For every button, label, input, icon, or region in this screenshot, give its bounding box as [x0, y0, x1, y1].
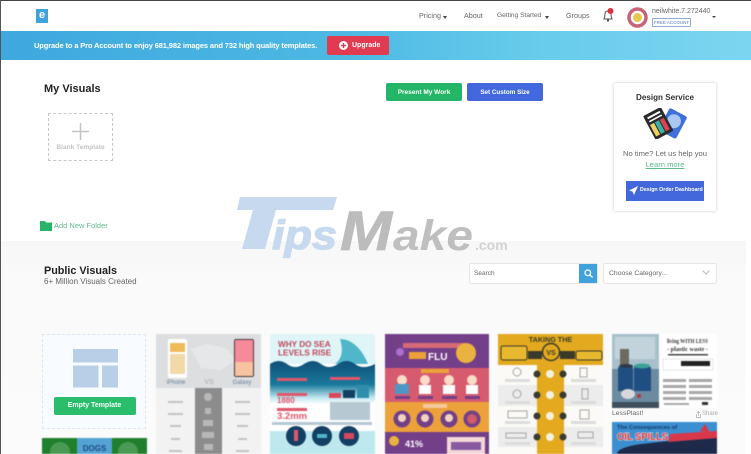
heading: public visuals: Public Visuals — [44, 265, 117, 277]
present my work button: Present My Work — [398, 89, 450, 96]
panel: design service — [614, 83, 716, 211]
thumbnail: less plastic — [611, 334, 714, 409]
blank template card — [48, 113, 113, 161]
watermark: TipsMake.com: .com — [475, 237, 508, 253]
icon: plus circle — [339, 41, 348, 50]
icon: plus — [72, 123, 89, 140]
free account badge: FREE ACCOUNT — [654, 20, 689, 25]
icon: design illustration — [643, 108, 687, 139]
icon: layout — [73, 349, 118, 388]
heading: my visuals: My Visuals — [44, 83, 101, 95]
icon: share — [696, 411, 701, 418]
thumbnail: why do sea levels rise: LEVELS RISE — [278, 348, 332, 358]
thumbnail: why do sea levels rise: WHY DO SEA — [278, 340, 331, 349]
blank template label: Blank Template — [56, 144, 105, 151]
upgrade button — [327, 36, 389, 55]
thumbnail: oil spills — [611, 421, 718, 454]
thumbnail: dogs — [41, 437, 148, 454]
upgrade banner — [1, 31, 751, 60]
nav: groups: Groups — [566, 11, 590, 20]
add folder label: Add New Folder — [54, 221, 108, 230]
navigation bar — [36, 7, 716, 28]
thumbnail: dogs: DOGS — [83, 444, 107, 453]
public visuals background — [0, 241, 746, 454]
watermark: TipsMake.com: ake — [393, 212, 473, 260]
dropdown label: Choose Category... — [609, 270, 667, 277]
subheading: 6+ Million Visuals Created — [44, 277, 137, 286]
search box — [470, 264, 597, 283]
thumbnail: flu — [384, 333, 490, 454]
thumbnail: why do sea levels rise: 1880 — [277, 396, 295, 405]
nav: pricing: Pricing — [419, 11, 441, 20]
set custom size button: Set Custom Size — [480, 89, 530, 96]
icon: magnifier — [584, 269, 593, 278]
user name: neilwhite.7.272440 — [652, 8, 710, 15]
upgrade message: Upgrade to a Pro Account to enjoy 681,982 images and 732 high quality templates. — [34, 41, 317, 50]
free account badge — [652, 18, 691, 27]
icon: user avatar — [627, 7, 648, 28]
learn more link: Learn more — [646, 160, 684, 169]
empty template button — [54, 396, 136, 414]
thumbnail: iphone vs galaxy: Galaxy — [233, 380, 251, 386]
thumbnail: flu: 41% — [405, 439, 423, 449]
icon: paper plane — [629, 186, 638, 195]
thumbnail: why do sea levels rise — [269, 334, 376, 454]
share label: Share — [702, 411, 718, 417]
icon: notification bell — [603, 8, 614, 22]
empty template button: Empty Template — [68, 402, 121, 408]
user menu caret — [712, 16, 716, 18]
nav: pricing caret — [443, 16, 447, 19]
icon: folder — [40, 221, 52, 231]
screenshot frame — [0, 0, 751, 1]
icon: logo — [36, 9, 48, 23]
design service heading: Design Service — [636, 93, 694, 102]
watermark: TipsMake.com: ips — [272, 212, 337, 258]
category dropdown — [604, 264, 716, 283]
upgrade label: Upgrade — [352, 42, 380, 49]
thumbnail: iphone vs galaxy — [156, 334, 262, 454]
thumbnail: taking the bus vs car: VS — [546, 350, 556, 357]
thumbnail label: LessPlast! — [612, 410, 643, 417]
set custom size button — [467, 83, 543, 101]
thumbnail: flu: FLU — [428, 352, 447, 363]
dashboard label: Design Order Dashboard — [640, 187, 703, 193]
design order dashboard button — [626, 181, 704, 201]
search placeholder: Search — [474, 270, 495, 277]
thumbnail: iphone vs galaxy: iPhone — [167, 380, 186, 386]
icon: logo: e — [39, 9, 45, 21]
watermark: TipsMake.com: M — [340, 199, 393, 262]
nav: getting started: Getting Started — [497, 12, 541, 19]
thumbnail: why do sea levels rise: 3.2mm — [277, 411, 307, 422]
thumbnail: taking the bus vs car — [497, 333, 604, 454]
thumbnail: oil spills: OIL SPILLS — [617, 431, 668, 443]
thumbnail: iphone vs galaxy: VS — [204, 379, 214, 386]
nav: getting started caret — [545, 16, 549, 19]
share link — [696, 410, 718, 418]
nav: about: About — [464, 11, 483, 20]
empty template card — [42, 334, 146, 429]
thumbnail: less plastic: - plastic waste - — [667, 346, 708, 353]
add new folder — [40, 221, 108, 231]
watermark: TipsMake.com — [237, 197, 508, 262]
help text: No time? Let us help you — [623, 149, 707, 158]
dropdown chevron — [702, 270, 710, 275]
search button — [579, 264, 597, 283]
thumbnail: taking the bus vs car: TAKING THE — [529, 335, 572, 344]
present my work button — [386, 83, 462, 101]
thumbnail: oil spills: The Consequences of — [617, 425, 677, 431]
